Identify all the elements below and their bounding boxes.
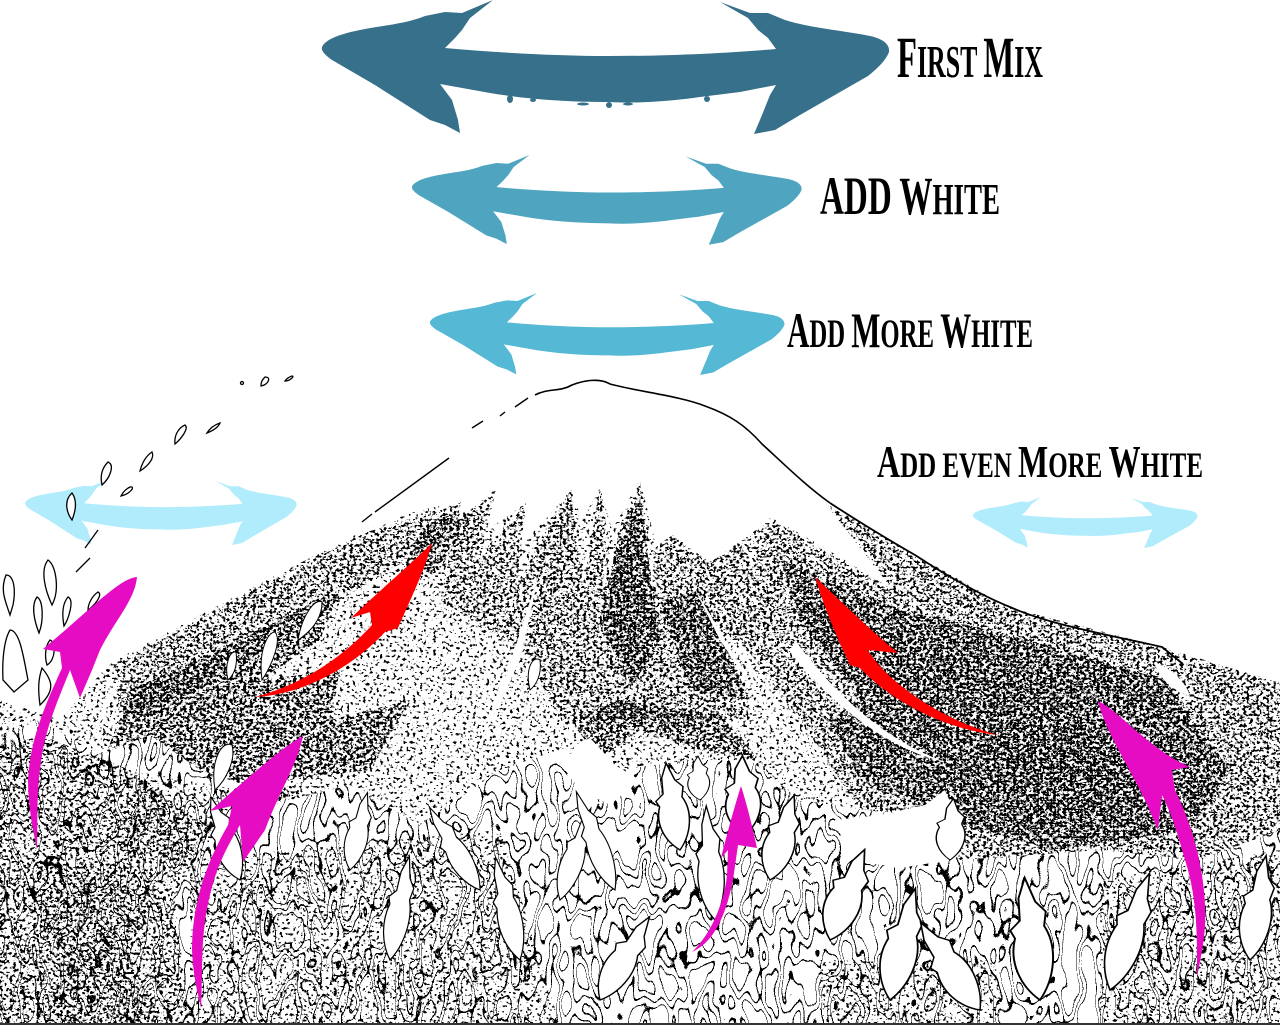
- slope: small white lobes: [214, 590, 540, 790]
- slope: medium speckle upper band: [115, 504, 461, 720]
- label: add white: ADD WHITE: [820, 166, 1000, 226]
- splash: left droplets: [3, 376, 293, 705]
- arrow: red left: [255, 543, 432, 697]
- foreground: left darker scrub: [30, 770, 240, 1025]
- slope: snow-line teeth: [440, 480, 780, 660]
- label: add even more white: ADD EVEN MORE WHITE: [877, 436, 1203, 487]
- label: first mix: FIRST MIX: [897, 25, 1043, 90]
- arrow: red right: [815, 577, 998, 735]
- arrow: magenta far left: [28, 577, 137, 850]
- foreground: scattered speckle: [190, 830, 1280, 1025]
- bottom edge line: [0, 1023, 1280, 1025]
- slope: medium speckle centre: [520, 485, 750, 720]
- mountain: slope texture: [0, 480, 1280, 1025]
- arrow: magenta left centre: [192, 736, 303, 1008]
- slope: dense speckle, right flank: [780, 560, 1230, 850]
- mountain: white streaks: [375, 570, 945, 775]
- arrow: add more white: [430, 293, 784, 375]
- arrow: first mix: [322, 0, 889, 134]
- slope: centre ridges: [150, 500, 750, 850]
- slope: darkest patch overlay: [985, 720, 1150, 805]
- slope: dense speckle, left shoulder: [100, 590, 410, 790]
- mountain: summit outline: [362, 380, 1183, 664]
- foreground: contour lines: [0, 720, 1280, 1025]
- slope: centre dark ridge: [570, 700, 760, 760]
- arrow: add white: [412, 155, 802, 245]
- foreground: left dense scrub: [0, 735, 210, 1025]
- label: add more white: ADD MORE WHITE: [787, 302, 1033, 358]
- slope: darkest patch: [960, 710, 1170, 815]
- arrow: magenta right: [1098, 701, 1205, 978]
- arrow: lightest right: [973, 497, 1198, 548]
- foreground: leaf shapes: [198, 755, 1280, 1020]
- arrow: magenta centre: [692, 786, 757, 952]
- arrow: lightest left: [25, 480, 297, 545]
- mountain: pale gaps: [565, 662, 1190, 868]
- slope: medium speckle right flank: [700, 503, 1280, 860]
- foreground: vegetation: [0, 720, 1280, 1025]
